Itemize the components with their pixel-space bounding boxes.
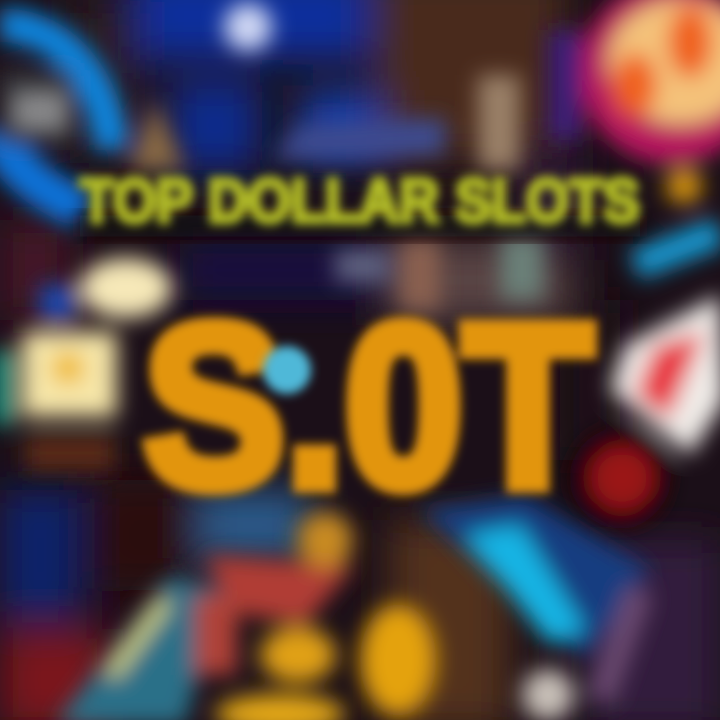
icon: light blue dot bbox=[263, 346, 311, 394]
headline: SLOT: S.0T bbox=[143, 277, 593, 536]
left lamp and slot screen bbox=[0, 235, 544, 471]
dark band behind subtitle bbox=[80, 215, 640, 237]
top-left blue neon arc bbox=[0, 3, 520, 210]
subtitle: top dollar slots: TOP DOLLAR SLOTS bbox=[80, 167, 640, 236]
right slot reel with 7 bbox=[570, 295, 720, 528]
top-right neon sign bbox=[565, 0, 720, 265]
bottom machines and characters bbox=[55, 495, 650, 720]
